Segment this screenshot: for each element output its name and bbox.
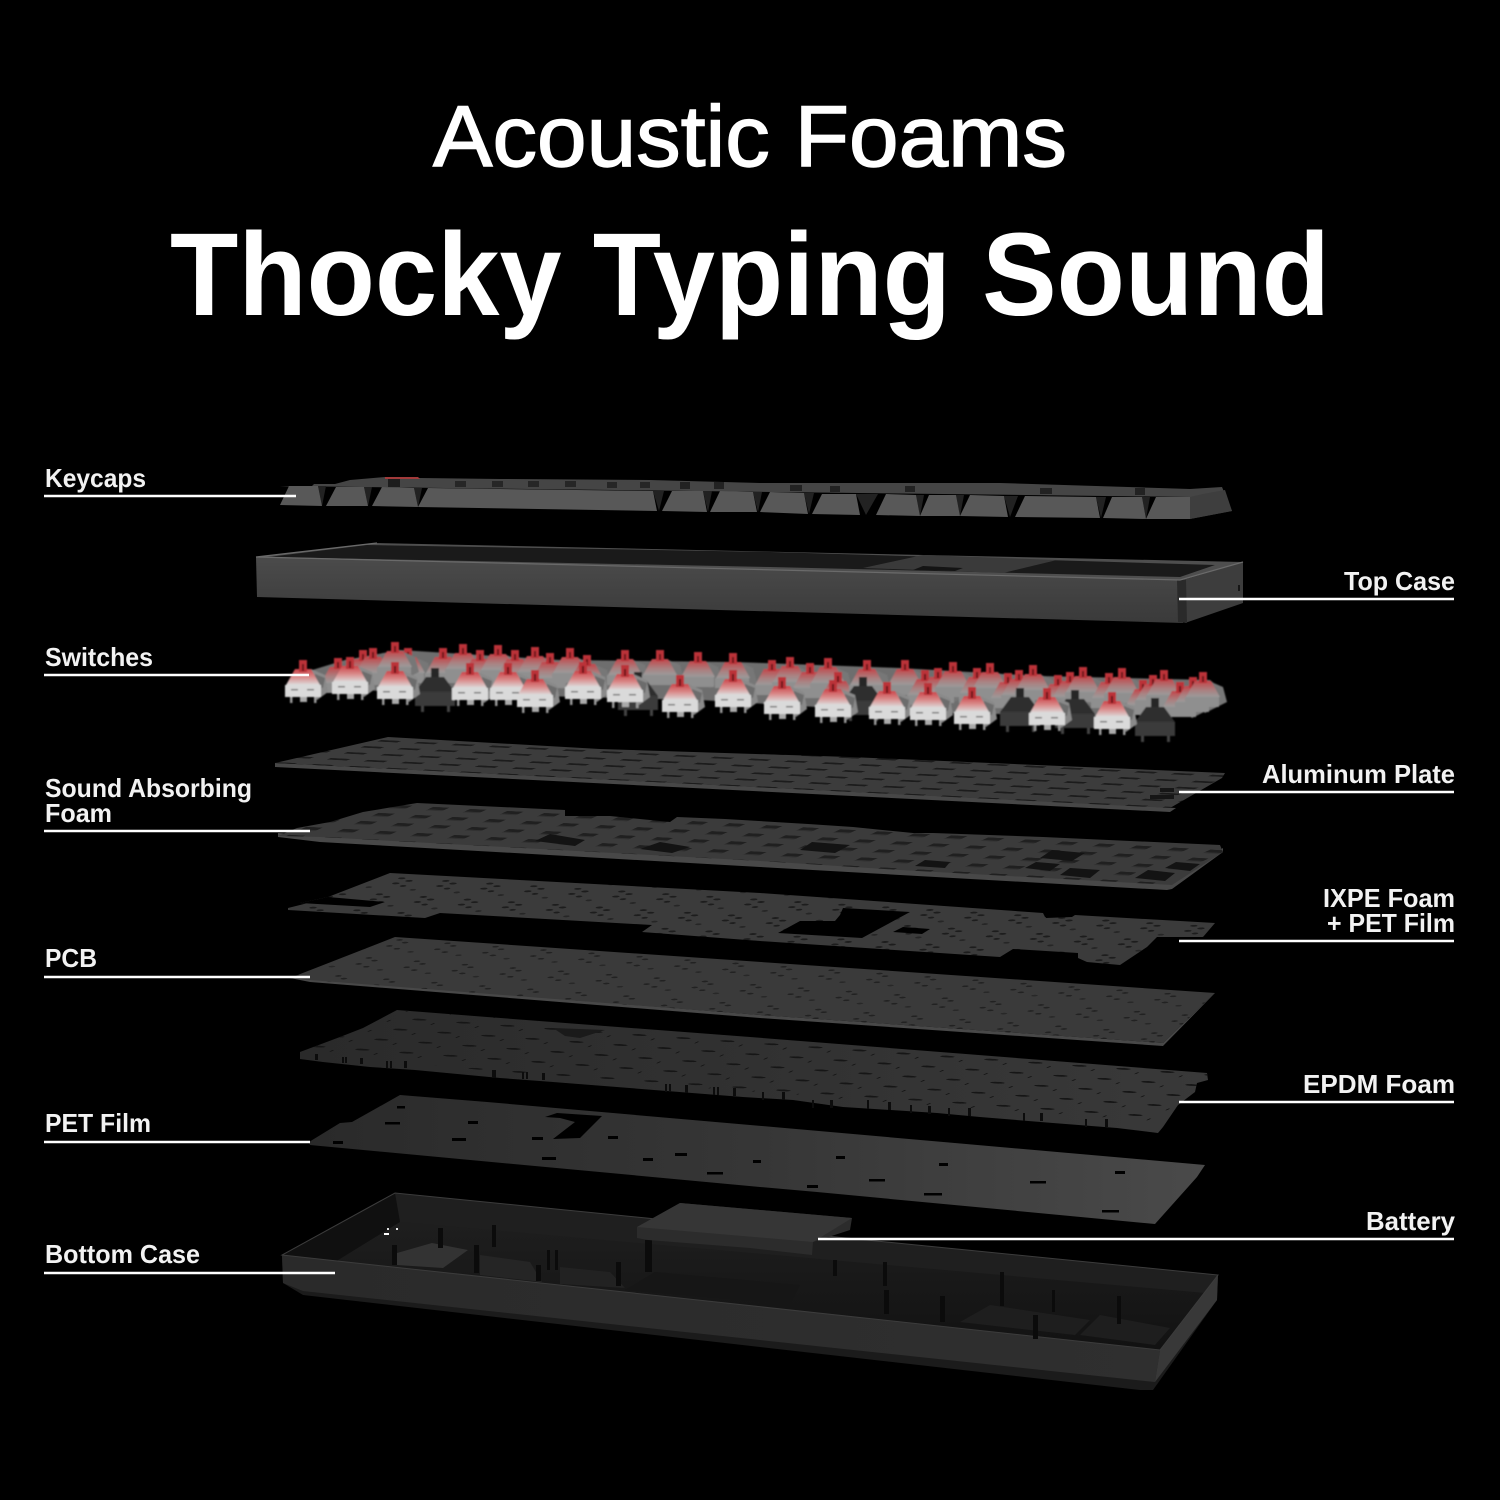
label: Sound Absorbing Foam: Foam	[45, 798, 112, 828]
layer: PET film	[309, 1095, 1205, 1224]
label: Top Case: Top Case	[1344, 566, 1455, 596]
title: Thocky Typing Sound: Thocky Typing Sound	[170, 209, 1330, 341]
label: EPDM Foam: EPDM Foam	[1303, 1069, 1455, 1099]
label: IXPE Foam + PET Film: + PET Film	[1327, 908, 1455, 938]
layer: EPDM foam	[300, 1010, 1208, 1133]
label: PCB: PCB	[45, 943, 97, 973]
label: Sound Absorbing Foam: Sound Absorbing	[45, 773, 252, 803]
layer: battery	[637, 1203, 852, 1255]
layer: aluminum plate	[275, 737, 1225, 812]
label: Aluminum Plate: Aluminum Plate	[1262, 759, 1455, 789]
label: PET Film: PET Film	[45, 1108, 151, 1138]
label: IXPE Foam + PET Film	[1179, 883, 1455, 941]
label: Switches: Switches	[45, 642, 153, 672]
layer: switches	[285, 642, 1227, 742]
layer: keycaps	[280, 477, 1232, 519]
label: Keycaps: Keycaps	[45, 463, 146, 493]
label: Battery: Battery	[1366, 1206, 1456, 1236]
label: Sound Absorbing Foam	[44, 773, 310, 831]
layer: PCB	[290, 937, 1215, 1046]
label: IXPE Foam + PET Film: IXPE Foam	[1323, 883, 1455, 913]
label: Bottom Case: Bottom Case	[45, 1239, 200, 1269]
layer: IXPE foam and PET film	[288, 873, 1215, 965]
layer: sound absorbing foam	[278, 803, 1223, 890]
layer: top case	[256, 543, 1243, 623]
title: Acoustic Foams: Acoustic Foams	[433, 89, 1067, 185]
layer: bottom case	[282, 1193, 1218, 1390]
